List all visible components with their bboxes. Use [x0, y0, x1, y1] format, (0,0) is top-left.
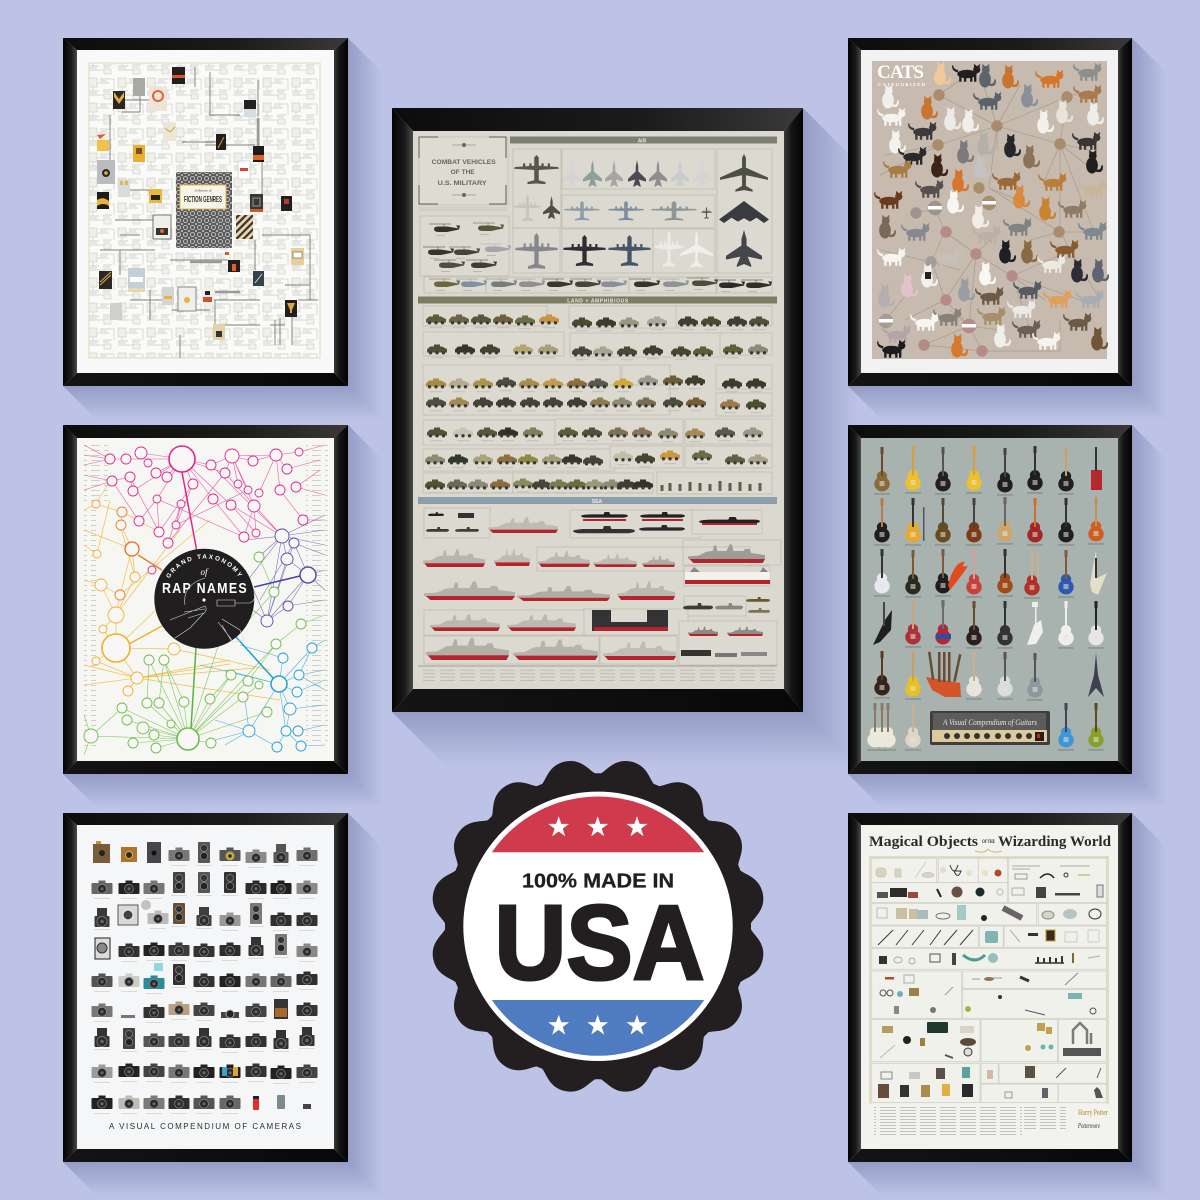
network nodes: purple: [261, 529, 316, 627]
SEA section bar: [418, 497, 777, 505]
Harry Potter logo: Harry Potter: [1078, 1107, 1108, 1117]
panel: Cameras poster: [63, 813, 348, 1162]
LAND section bar: [418, 296, 777, 304]
panel: Rap Names poster: [63, 425, 348, 774]
panel: Cats poster: [848, 38, 1132, 386]
poster title: Magical Objects: [869, 834, 978, 850]
panel: Wizarding World poster: [848, 813, 1132, 1162]
poster centre: title cover: FICTION GENRES: [184, 194, 222, 204]
frame: [63, 425, 348, 774]
panel: Combat Vehicles poster: [392, 108, 803, 712]
land vehicles: [425, 314, 769, 493]
AIR section bar: [510, 136, 777, 144]
legend text strip: [423, 668, 775, 682]
breed connection lines: [880, 75, 1100, 351]
amp poster title: [930, 711, 1050, 745]
poster title: [869, 834, 1112, 850]
ships: [423, 512, 770, 660]
frame: [848, 425, 1132, 774]
main hub connectors: [182, 472, 197, 552]
frame: [392, 108, 803, 712]
badge headline: USA: [494, 884, 704, 1002]
poster title: [419, 137, 508, 205]
magical object icons: [876, 862, 1103, 1098]
connection lines: purple: [240, 515, 325, 621]
blue cap with stars: [492, 1000, 704, 1056]
breed hubs: [879, 89, 1073, 357]
badge: 100% Made in USA: [427, 756, 769, 1097]
poster title: OF THE: [451, 169, 475, 176]
connection lines: blue: [200, 640, 325, 747]
SEA section bar: SEA: [592, 499, 603, 505]
air section panels: [420, 149, 772, 293]
title record disc: RAP NAMES: [162, 581, 248, 597]
connection lines: green: [84, 557, 325, 755]
frame: [63, 813, 348, 1162]
panel: Guitars poster: [848, 425, 1132, 774]
frame: [848, 813, 1132, 1162]
frame: [848, 38, 1132, 386]
cat poster title: CATS: [877, 62, 924, 83]
title record disc: of: [200, 567, 209, 577]
frame: [63, 38, 348, 386]
poster title: A VISUAL COMPENDIUM OF CAMERAS: [109, 1122, 301, 1131]
poster title: COMBAT VEHICLES: [432, 159, 496, 166]
network nodes: orange and yellow: [92, 500, 180, 696]
book cover icons: [97, 67, 304, 340]
title record disc: [154, 548, 256, 649]
network nodes: blue: [243, 643, 317, 752]
camera grid: [92, 841, 318, 1114]
helicopters: [423, 223, 772, 292]
poster centre: title cover: [176, 172, 232, 248]
cat poster title: CATEGORIZED: [878, 82, 926, 87]
connection lines: orange and yellow: [84, 481, 280, 700]
land section panels: [423, 306, 772, 494]
connection lines: magenta: [84, 445, 325, 543]
network nodes: green: [84, 552, 306, 753]
poster centre: title cover: A History of: [193, 188, 213, 192]
poster title: OF THE: [982, 840, 995, 845]
AIR section bar: AIR: [638, 138, 647, 144]
poster title: Wizarding World: [998, 834, 1112, 850]
poster title: U.S. MILITARY: [438, 180, 487, 187]
panel: Fiction Genres poster: [63, 38, 348, 386]
amp poster title: A Visual Compendium of Guitars: [942, 718, 1037, 727]
hub labels: [879, 201, 996, 328]
badge text: 100% MADE IN: [522, 871, 674, 893]
sea section panels: [424, 508, 781, 665]
aircraft: [514, 154, 769, 269]
title record disc: GRAND TAXONOMY: [166, 554, 242, 578]
red cap with stars: [492, 797, 704, 852]
LAND section bar: LAND + AMPHIBIOUS: [567, 298, 629, 304]
publisher logo: Pottermore: [1077, 1122, 1100, 1130]
section panels: [872, 858, 1107, 1103]
network nodes: magenta: [105, 446, 308, 574]
citation text block: [874, 1105, 1022, 1137]
badge scalloped edge: [427, 756, 769, 1097]
cat illustrations: [874, 62, 1109, 358]
guitar grid: [867, 446, 1107, 750]
